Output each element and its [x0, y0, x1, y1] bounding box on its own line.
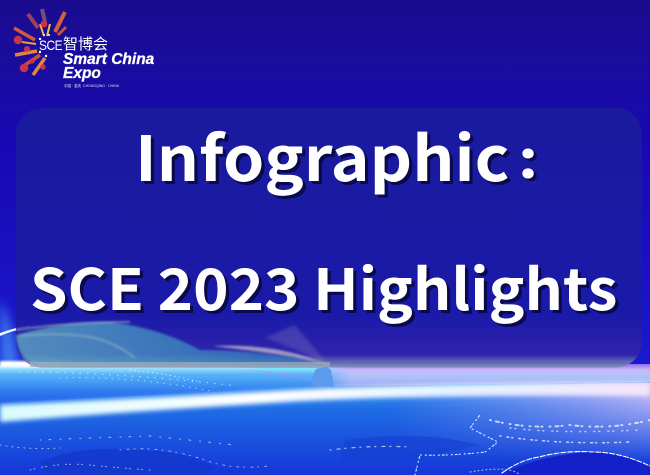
vehicle seen through panel — [16, 322, 330, 367]
logo: SCE letters: SCE — [39, 37, 62, 53]
title line 2: SCE 2023 Highlights — [30, 245, 617, 327]
logo — [13, 8, 154, 88]
title colon: : — [518, 117, 538, 193]
logo: English name: Smart China — [63, 51, 154, 68]
star speckle above horizon — [20, 370, 230, 392]
city lights — [0, 415, 650, 475]
logo: location line: 中国 · 重庆 CHONGQING · CHINA — [64, 84, 119, 88]
logo: Chinese name: 智博会 — [63, 33, 108, 54]
dark land and water shapes — [500, 452, 650, 475]
icon: radiating burst logo — [13, 8, 67, 76]
logo: English name — [63, 51, 154, 82]
translucent rounded panel — [16, 108, 642, 368]
logo: English name: Expo — [63, 64, 101, 82]
title line 1: Infographic — [135, 109, 509, 199]
left edge glow — [0, 300, 20, 368]
futuristic vehicle shape — [180, 363, 334, 387]
